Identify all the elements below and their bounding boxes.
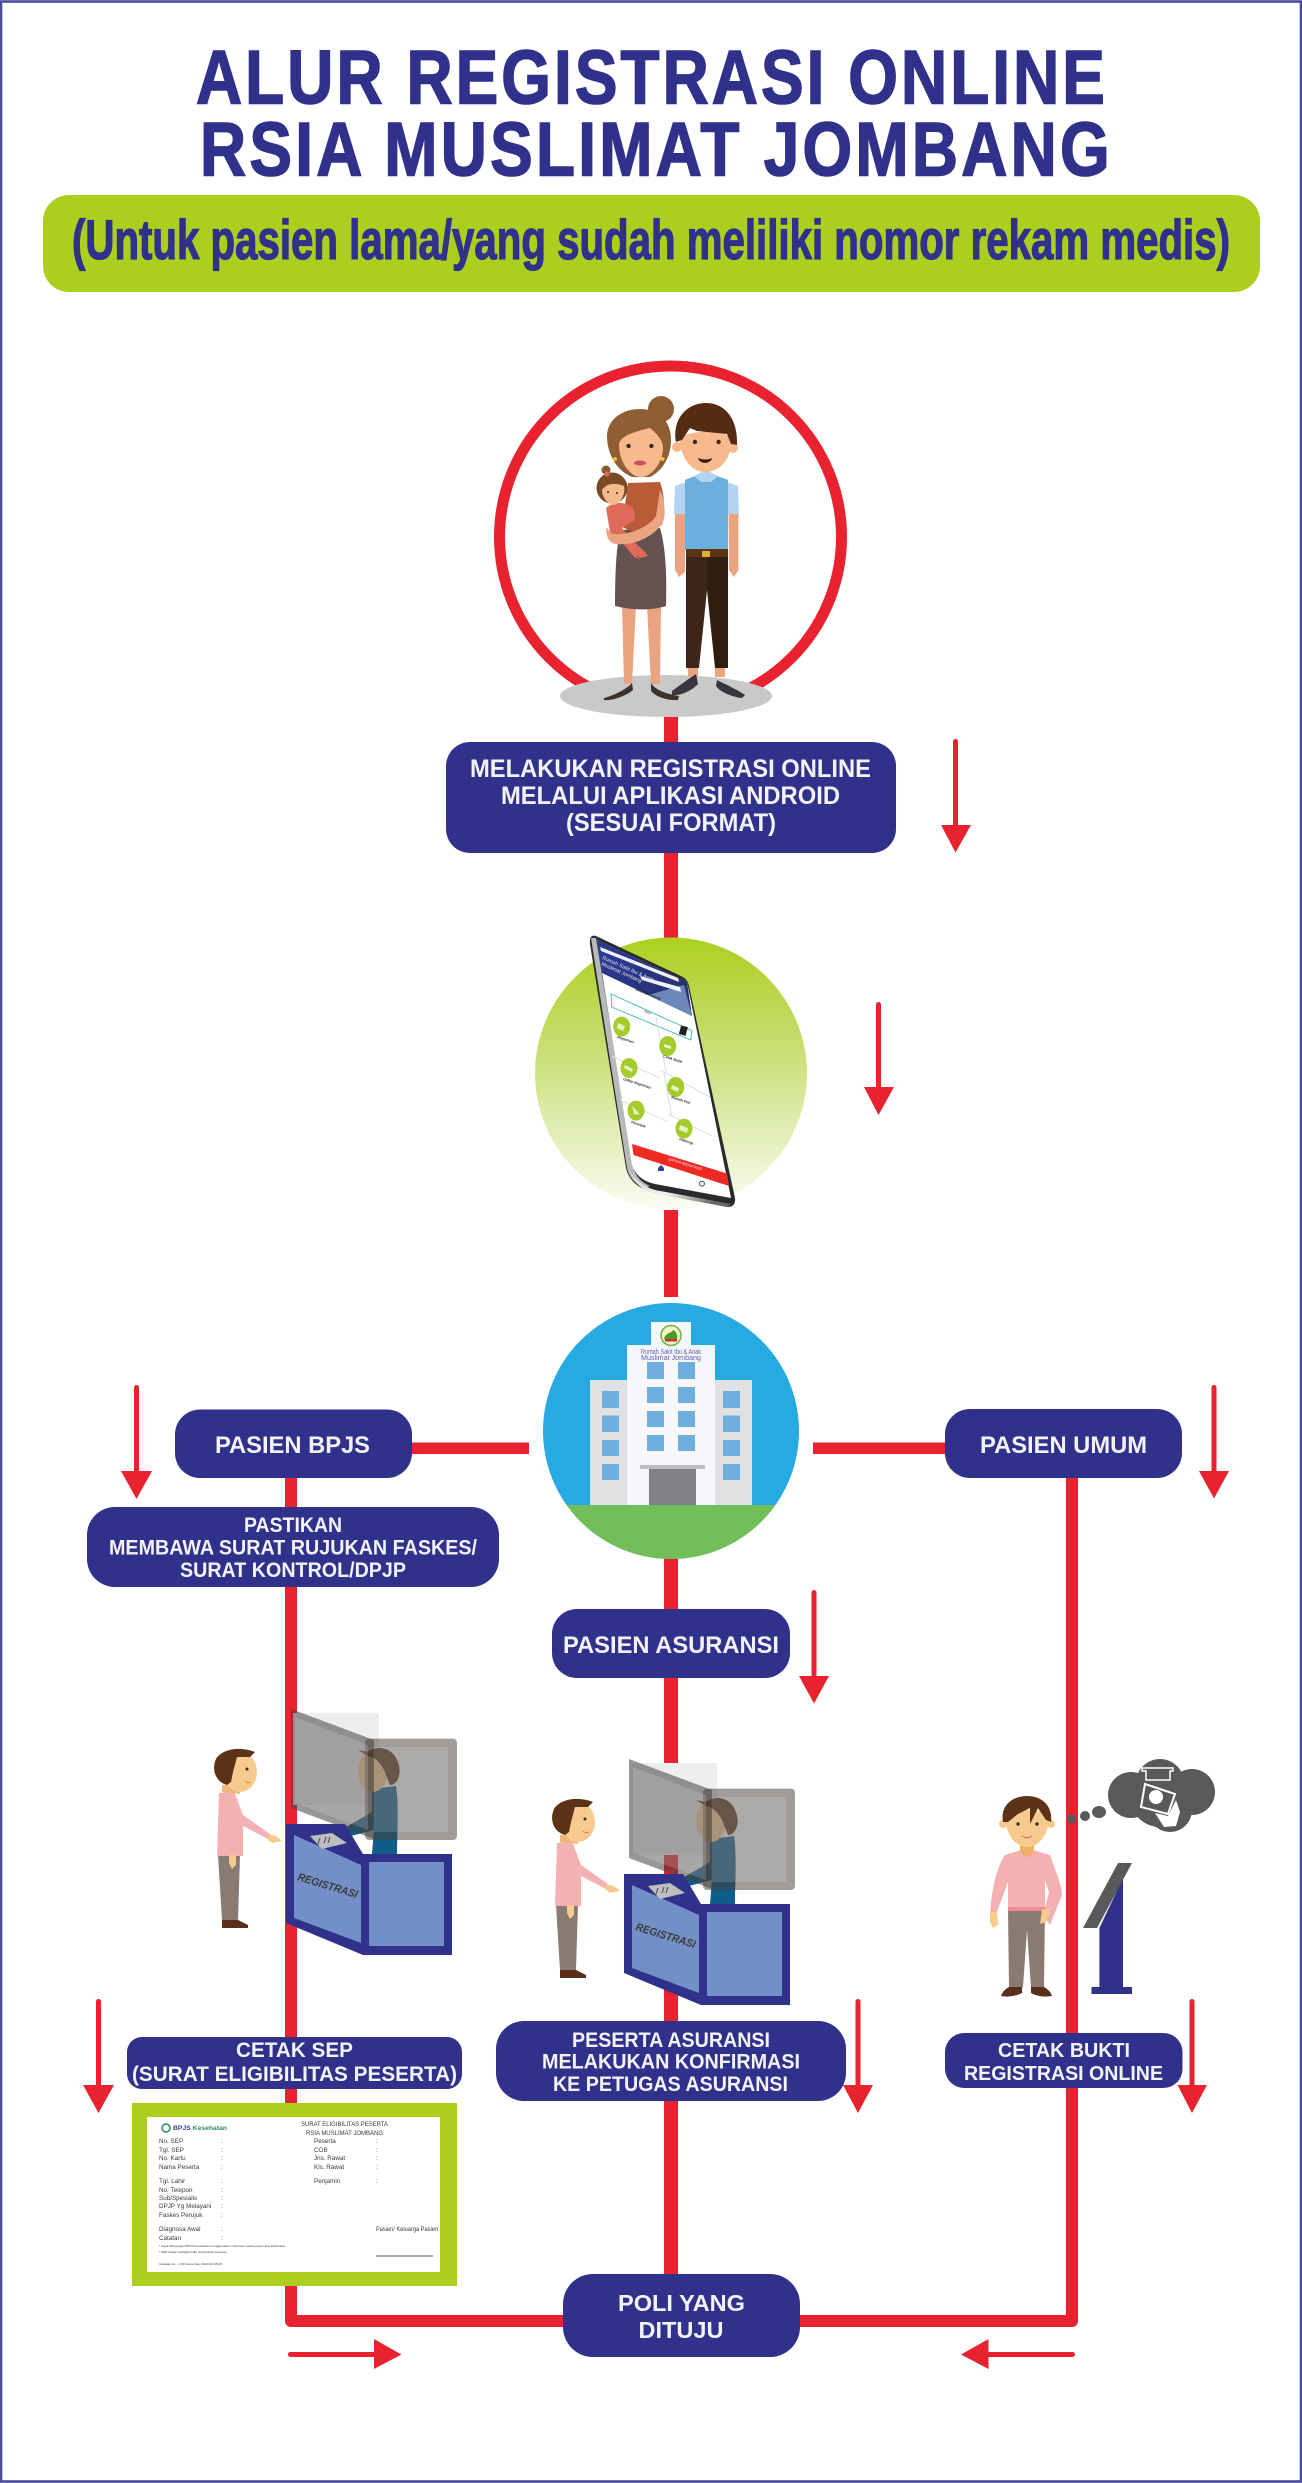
subtitle banner <box>43 195 1260 292</box>
arrow: down sep <box>83 1999 114 2113</box>
arrow: left <box>961 2339 1075 2369</box>
thought bubble <box>1068 1759 1215 1832</box>
sep document panel: : <box>221 2212 223 2219</box>
phone circle background <box>535 938 807 1210</box>
pill: pasien asuransi <box>552 1609 790 1678</box>
arrow: down bukti <box>1178 1999 1207 2113</box>
destination pill: poli: DITUJU <box>638 2317 724 2343</box>
patient <box>552 1799 620 1978</box>
arrow: down peserta <box>843 1999 873 2113</box>
sep document panel: Kls. Rawat <box>314 2164 344 2171</box>
title <box>196 34 1110 192</box>
sep document panel: Penjamin <box>314 2178 341 2185</box>
sep document panel: No. SEP <box>159 2138 183 2145</box>
app content: Petunjuk <box>631 1120 646 1129</box>
sep document panel: COB <box>314 2147 328 2154</box>
sep document panel: Cetakan ke - 1 09 December 2020 20:05:00 <box>159 2262 222 2266</box>
app content: Hubungi <box>679 1137 694 1145</box>
step box: registrasi online: MELAKUKAN REGISTRASI ONLINE <box>470 755 871 783</box>
pill: pastikan surat rujukan: SURAT KONTROL/DPJP <box>180 1559 406 1582</box>
hospital name <box>641 1347 701 1362</box>
hospital logo <box>661 1326 681 1346</box>
sep document panel: Tgl. Lahir <box>159 2178 185 2185</box>
step box: registrasi online <box>446 742 896 853</box>
app content: RSIA <box>644 1009 652 1016</box>
step box: registrasi online: (SESUAI FORMAT) <box>566 809 776 837</box>
mother <box>604 396 679 700</box>
step box: cetak bukti: CETAK BUKTI <box>998 2039 1130 2062</box>
step box: cetak bukti <box>945 2033 1182 2088</box>
title: RSIA MUSLIMAT JOMBANG <box>200 106 1110 192</box>
patient <box>214 1749 282 1928</box>
icon: hospital building <box>540 1303 802 1565</box>
app header: Rumah Sakit Ibu & Anak <box>601 955 655 984</box>
pill: pasien bpjs: PASIEN BPJS <box>215 1432 370 1459</box>
pill: pasien umum <box>945 1409 1182 1478</box>
sep document panel: : <box>221 2178 223 2185</box>
icon: kiosk <box>1083 1863 1132 1994</box>
arrow: down asuransi <box>799 1590 829 1704</box>
arrow: down phone <box>864 1002 894 1115</box>
pill: pasien asuransi: PASIEN ASURANSI <box>563 1632 779 1659</box>
sep document panel: Tgl. SEP <box>159 2147 184 2154</box>
sep document panel: : <box>221 2138 223 2145</box>
sep document panel: * SEP bukan sebagai bukti penjaminan peserta. <box>159 2250 227 2254</box>
sep document panel: No. Telepon <box>159 2187 193 2194</box>
person at kiosk <box>990 1796 1062 1997</box>
sep document panel: : <box>376 2155 378 2162</box>
arrow: down 1 <box>941 739 971 852</box>
app content: Registrasi <box>617 1035 634 1044</box>
app content <box>611 987 712 1145</box>
icon: smartphone app <box>590 936 735 1207</box>
sep document panel: : <box>376 2147 378 2154</box>
step box: registrasi online: MELALUI APLIKASI ANDROID <box>501 782 840 810</box>
step box: peserta asuransi: KE PETUGAS ASURANSI <box>553 2073 788 2096</box>
sep document panel: Diagnosa Awal <box>159 2226 201 2233</box>
step box: cetak bukti: REGISTRASI ONLINE <box>964 2062 1163 2085</box>
app header: Muslimat Jombang <box>600 961 643 985</box>
arrow: right <box>288 2339 402 2369</box>
sep document panel: : <box>221 2164 223 2171</box>
desk clerk <box>672 1798 738 1904</box>
sep document panel: RSIA MUSLIMAT JOMBANG <box>306 2130 383 2137</box>
sep document panel: : <box>221 2226 223 2233</box>
app content: Rumah Poli <box>671 1095 691 1105</box>
sep document panel: : <box>376 2164 378 2171</box>
sep document panel: : <box>376 2178 378 2185</box>
baby <box>596 466 648 560</box>
sep document panel: Sub/Spesialis <box>159 2195 197 2202</box>
sep document panel: DPJP Yg Melayani <box>159 2203 211 2210</box>
sep document panel: SURAT ELIGIBILITAS PESERTA <box>301 2121 389 2128</box>
registration desk asuransi <box>552 1759 795 2005</box>
pill: pastikan surat rujukan: PASTIKAN <box>244 1514 342 1537</box>
app content: Daftar Registrasi <box>623 1077 651 1090</box>
title: ALUR REGISTRASI ONLINE <box>196 34 1105 120</box>
sep document panel: : <box>221 2147 223 2154</box>
sep document panel: Faskes Perujuk <box>159 2212 203 2219</box>
sep document panel: * Saya Menyetujui BPJS Kesehatan menggunakan informasi medis pasien jika diperlukan. <box>159 2244 286 2248</box>
hospital name: Muslimat Jombang <box>641 1353 701 1362</box>
pill: pastikan surat rujukan: MEMBAWA SURAT RUJUKAN FASKES/ <box>109 1536 477 1560</box>
destination pill: poli <box>563 2274 800 2357</box>
arrow: down umum <box>1199 1385 1229 1498</box>
destination pill: poli: POLI YANG <box>618 2290 745 2316</box>
father <box>672 403 745 698</box>
red bar <box>632 1144 729 1186</box>
desk label: REGISTRASI <box>634 1921 698 1951</box>
pill: pasien umum: PASIEN UMUM <box>980 1432 1147 1459</box>
pill: pasien bpjs <box>175 1410 412 1478</box>
sep document panel <box>132 2103 457 2286</box>
sep document panel: : <box>376 2138 378 2145</box>
sep document panel: : <box>221 2195 223 2202</box>
pill: pastikan surat rujukan <box>87 1507 499 1587</box>
step box: cetak sep: CETAK SEP <box>236 2039 353 2062</box>
step box: peserta asuransi: MELAKUKAN KONFIRMASI <box>542 2050 800 2074</box>
arrow: down bpjs <box>121 1385 152 1499</box>
sep document panel: : <box>221 2235 223 2242</box>
step box: peserta asuransi <box>496 2021 846 2101</box>
mother arm <box>606 490 665 544</box>
registration desk bpjs <box>214 1709 457 1955</box>
sep document panel: Nama Peserta <box>159 2164 200 2171</box>
bpjs logo: BPJS Kesehatan <box>173 2125 227 2132</box>
app header <box>597 940 692 1016</box>
sep document panel: Jns. Rawat <box>314 2155 345 2162</box>
sep document panel: : <box>221 2155 223 2162</box>
step box: peserta asuransi: PESERTA ASURANSI <box>572 2029 770 2052</box>
sep document panel: No. Kartu <box>159 2155 186 2162</box>
desk clerk <box>334 1748 400 1854</box>
family illustration in red ring <box>500 366 842 717</box>
desk label: REGISTRASI <box>296 1871 360 1901</box>
sep document panel: : <box>221 2187 223 2194</box>
sep document panel: : <box>221 2203 223 2210</box>
sep document panel: Catatan <box>159 2235 182 2242</box>
thought icon <box>1141 1768 1180 1827</box>
red bar: DAFTAR REGISTRASI <box>668 1157 702 1171</box>
app content: Cetak Bukti <box>663 1054 683 1064</box>
app content: Selamat Datang <box>635 987 661 1001</box>
sep document panel: Peserta <box>314 2138 336 2145</box>
step box: cetak sep <box>127 2037 462 2089</box>
hospital name: Rumah Sakit Ibu & Anak <box>641 1347 701 1356</box>
sep document panel: Pasien/ Keluarga Pasien <box>376 2226 438 2233</box>
step box: cetak sep: (SURAT ELIGIBILITAS PESERTA) <box>132 2063 457 2086</box>
flow connector lines <box>291 700 1072 2321</box>
